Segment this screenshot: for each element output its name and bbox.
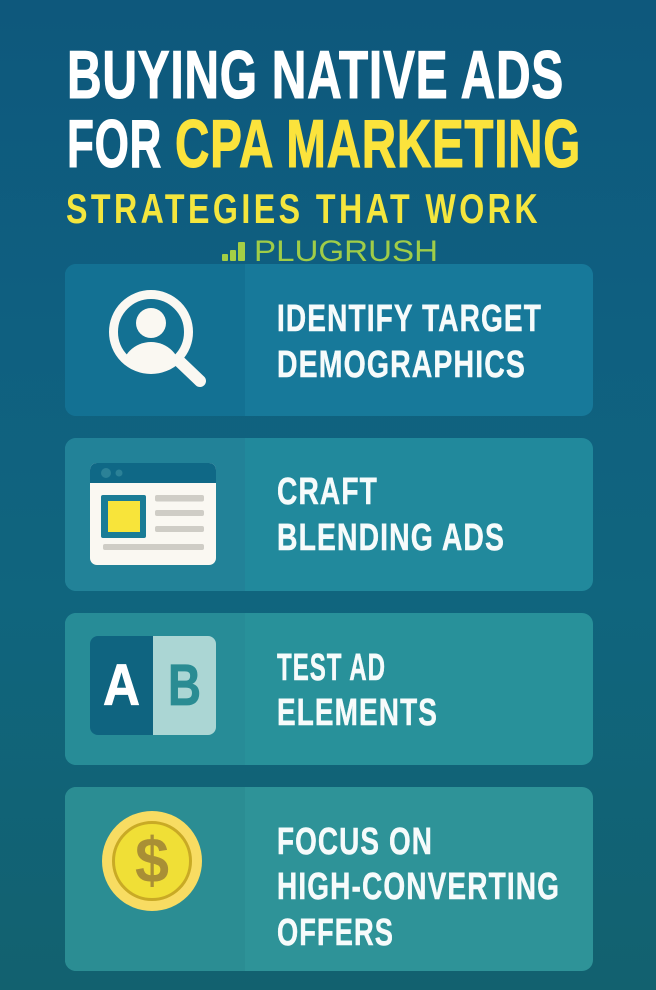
icon: dollar coin: $	[135, 824, 169, 896]
label: test ad elements: ELEMENTS	[277, 692, 438, 734]
icon: magnifier with person	[114, 294, 200, 402]
logo: PlugRush: PLUGRUSH	[254, 235, 438, 268]
icon: dollar coin	[102, 811, 202, 911]
panel: craft blending ads	[65, 438, 593, 591]
title: FOR	[67, 106, 162, 182]
label: craft blending ads: CRAFT	[277, 471, 378, 513]
panel: focus on high-converting offers	[65, 787, 593, 971]
icon: A/B test: B	[168, 653, 201, 718]
label: identify target demographics: IDENTIFY TARGET	[277, 298, 542, 340]
icon: A/B test	[90, 636, 216, 735]
label: focus on high-converting offers: OFFERS	[277, 912, 394, 954]
icon: browser window	[90, 463, 216, 565]
label: identify target demographics: DEMOGRAPHICS	[277, 344, 526, 386]
title	[67, 37, 581, 182]
label: focus on high-converting offers	[277, 821, 560, 954]
label: craft blending ads: BLENDING ADS	[277, 517, 505, 559]
icon: A/B test: A	[103, 653, 140, 718]
label: test ad elements: TEST AD	[277, 647, 386, 689]
panel: test ad elements	[65, 613, 593, 765]
label: identify target demographics	[277, 298, 542, 386]
label: focus on high-converting offers: FOCUS ON	[277, 821, 433, 863]
label: craft blending ads	[277, 471, 505, 559]
label: test ad elements	[277, 647, 438, 734]
label: focus on high-converting offers: HIGH-CONVERTING	[277, 866, 560, 908]
panel: identify target demographics	[65, 264, 593, 416]
